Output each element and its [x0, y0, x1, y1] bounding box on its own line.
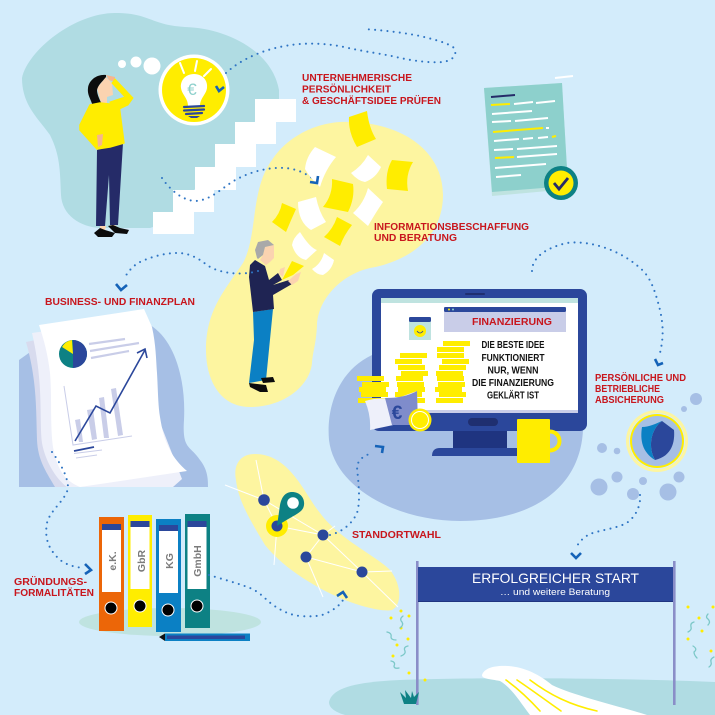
icon: yellow mug	[517, 419, 560, 463]
paper: flying yellow and white sheets	[272, 111, 413, 275]
label: information and advice	[374, 222, 529, 244]
icon: grass tuft	[400, 690, 419, 704]
panel: information backdrop blob	[206, 122, 443, 407]
dotted arrow: finance to insurance	[532, 242, 663, 365]
icon: light bulb with euro	[158, 54, 230, 126]
decorative bubbles around shield	[590, 393, 702, 500]
panel: idea backdrop blob	[22, 13, 279, 228]
finish banner	[416, 561, 676, 705]
finish banner: ERFOLGREICHER START	[472, 570, 639, 586]
window: finanzierung heading	[444, 307, 566, 332]
binder: e.K.	[99, 517, 124, 631]
icon: euro banknote	[365, 391, 418, 430]
panel: location backdrop blob	[235, 454, 399, 611]
label: insurance: PERSÖNLICHE UND	[595, 373, 686, 384]
confetti	[387, 606, 714, 682]
document: business and finance plan	[26, 309, 187, 487]
label: insurance	[595, 373, 686, 406]
text: financing statement: DIE BESTE IDEE	[482, 340, 545, 351]
shadow below binders	[79, 608, 261, 636]
icon: white staircase	[153, 99, 296, 234]
window: finanzierung heading: FINANZIERUNG	[472, 316, 552, 328]
label: location choice: STANDORTWAHL	[352, 530, 441, 541]
icon: pencil	[159, 634, 250, 641]
label: information and advice: INFORMATIONSBESCHAFFUNG	[374, 222, 529, 233]
dotted arrow: insurance to start banner	[571, 495, 640, 558]
panel: finish ground	[329, 678, 715, 715]
dotted arrow: idea to personality check	[216, 29, 455, 91]
text: financing statement: FUNKTIONIERT	[482, 353, 544, 364]
icon: arrow head at information	[310, 176, 318, 183]
label: information and advice: UND BERATUNG	[374, 233, 457, 244]
text: financing statement: DIE FINANZIERUNG	[472, 378, 554, 389]
label: insurance: ABSICHERUNG	[595, 395, 664, 406]
label: founding formalities: GRÜNDUNGS-	[14, 577, 87, 588]
label: founding formalities: FORMALITÄTEN	[14, 588, 94, 599]
label: insurance: BETRIEBLICHE	[595, 384, 660, 395]
arrow: growth line	[75, 349, 147, 441]
binder: KG	[156, 519, 181, 632]
label: founding formalities	[14, 577, 94, 599]
dotted arrow: location to finance	[330, 446, 383, 535]
dotted arrow: stairs to information	[162, 168, 312, 201]
figure: woman thinking	[80, 75, 133, 237]
label: personality and idea: UNTERNEHMERISCHE	[302, 73, 412, 84]
dotted arrow: business plan to formalities	[46, 452, 91, 574]
finish banner: … und weitere Beratung	[500, 587, 610, 598]
icon: euro banknote: €	[392, 403, 403, 424]
text: financing statement: GEKLÄRT IST	[487, 388, 539, 402]
icon: check badge	[544, 166, 578, 200]
binder: GmbH: GmbH	[192, 545, 204, 577]
map: location network	[225, 460, 398, 607]
binder: GbR: GbR	[136, 550, 148, 572]
label: personality and idea: & GESCHÄFTSIDEE PRÜFEN	[302, 96, 441, 107]
label: business plan: BUSINESS- UND FINANZPLAN	[45, 297, 195, 308]
icon: light bulb with euro: €	[187, 80, 197, 99]
binder: GmbH	[185, 514, 210, 628]
text: financing statement: NUR, WENN	[488, 366, 538, 376]
pie chart	[59, 340, 87, 368]
bar chart	[64, 386, 132, 445]
binder: KG: KG	[164, 553, 176, 569]
icon: smiley window	[409, 317, 431, 340]
label: personality and idea: PERSÖNLICHKEIT	[302, 84, 391, 96]
binder: GbR	[128, 515, 152, 627]
icon: shield	[626, 410, 688, 472]
panel: finance backdrop blob	[329, 355, 583, 521]
thought bubbles	[118, 56, 160, 74]
figure: man reading	[249, 240, 304, 392]
icon: gold coin	[408, 408, 432, 432]
dotted arrow: formalities to location	[209, 575, 347, 616]
panel: business plan blob	[19, 325, 208, 487]
chart: coin stacks	[357, 341, 470, 403]
binder: e.K.: e.K.	[107, 551, 119, 571]
monitor: financing	[357, 289, 587, 463]
document: checklist with tick	[484, 76, 578, 200]
label: personality and idea	[302, 73, 441, 107]
text: financing statement	[472, 340, 554, 402]
icon: white road with yellow lines	[482, 666, 647, 715]
icon: map pin	[277, 492, 304, 526]
dotted arrow: information to business plan	[116, 253, 258, 290]
